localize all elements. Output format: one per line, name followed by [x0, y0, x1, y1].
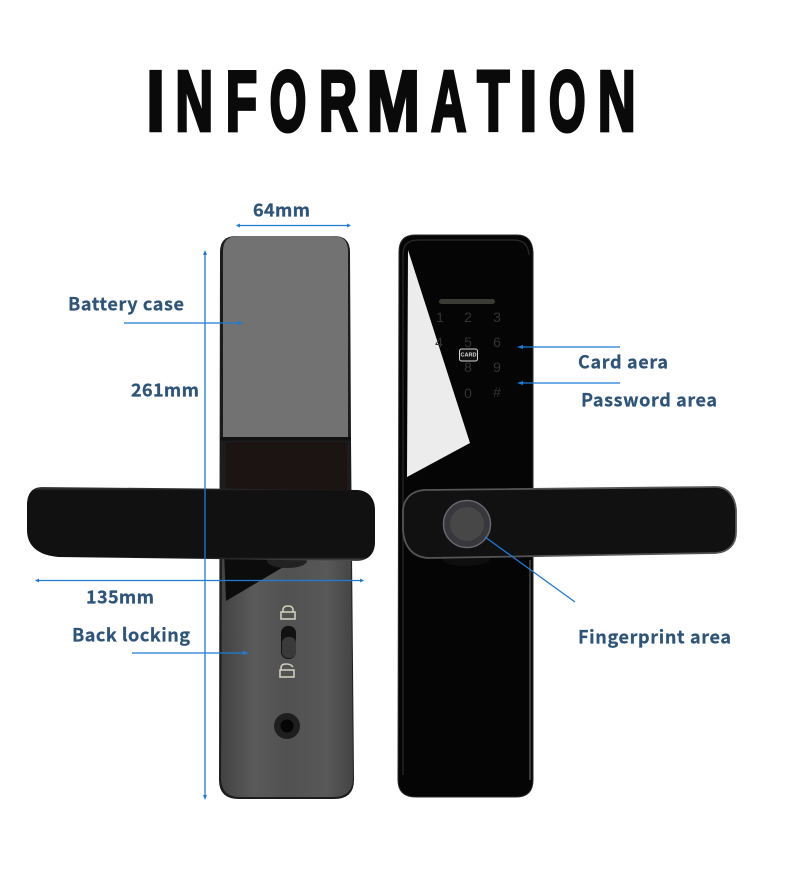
keypad: 6 — [493, 334, 501, 350]
keypad — [435, 309, 501, 401]
front plate — [398, 235, 533, 797]
card icon — [460, 349, 478, 361]
title: N — [175, 53, 213, 149]
keypad: 1 — [436, 309, 444, 325]
label: 261mm: 261mm — [131, 376, 199, 402]
keypad: 3 — [493, 309, 501, 325]
label: card aera: Card aera — [578, 348, 668, 374]
slide switch — [281, 626, 296, 659]
knob shadow — [442, 552, 490, 566]
keypad: 5 — [464, 334, 472, 350]
back handle — [27, 487, 375, 561]
plate edge highlight — [403, 240, 529, 775]
white reflection — [407, 250, 470, 477]
indicator bar — [439, 299, 495, 304]
title: O — [270, 54, 306, 149]
title — [146, 53, 636, 150]
label: fingerprint area: Fingerprint area — [578, 624, 731, 650]
screw hole — [274, 713, 300, 739]
title: N — [598, 53, 636, 149]
lock icon: locked — [281, 606, 295, 619]
fingerprint sensor — [444, 500, 490, 548]
arrow: back locking — [132, 651, 249, 655]
keypad: 2 — [464, 309, 472, 325]
title: T — [477, 54, 509, 149]
back plate — [219, 236, 354, 799]
title: M — [367, 54, 420, 149]
arrow: 64mm — [236, 224, 351, 228]
arrow: fingerprint area — [485, 537, 575, 602]
keypad: 4 — [435, 334, 443, 350]
knob shadow — [267, 554, 307, 568]
title: R — [319, 55, 357, 150]
front view of the lock — [398, 235, 736, 797]
arrow: card area — [517, 345, 620, 349]
arrow: battery case — [124, 321, 243, 325]
black panel under battery case — [226, 442, 347, 492]
label: battery case: Battery case — [68, 290, 184, 316]
label: 64mm: 64mm — [253, 196, 310, 222]
keypad: # — [493, 384, 501, 400]
label: 135mm: 135mm — [86, 584, 154, 610]
title: I — [146, 55, 165, 149]
lock icon: unlocked — [280, 664, 294, 677]
back plate lower panel — [221, 550, 353, 797]
keypad: 9 — [493, 359, 501, 375]
title: A — [431, 53, 466, 149]
arrow: password area — [517, 381, 620, 385]
label: back locking: Back locking — [72, 622, 190, 648]
title: I — [519, 55, 538, 149]
battery case — [223, 236, 348, 437]
dark reflection — [224, 550, 312, 601]
keypad: 8 — [464, 359, 472, 375]
back view of the lock — [27, 236, 375, 799]
arrow: 261mm — [203, 250, 207, 800]
title: F — [226, 53, 257, 149]
card icon: CARD — [461, 352, 476, 358]
keypad: 0 — [464, 385, 472, 401]
front handle — [403, 487, 736, 558]
arrow: 135mm — [35, 578, 364, 582]
label: password area: Password area — [581, 386, 717, 412]
dimension and callout lines — [35, 224, 620, 800]
title: O — [549, 54, 586, 149]
